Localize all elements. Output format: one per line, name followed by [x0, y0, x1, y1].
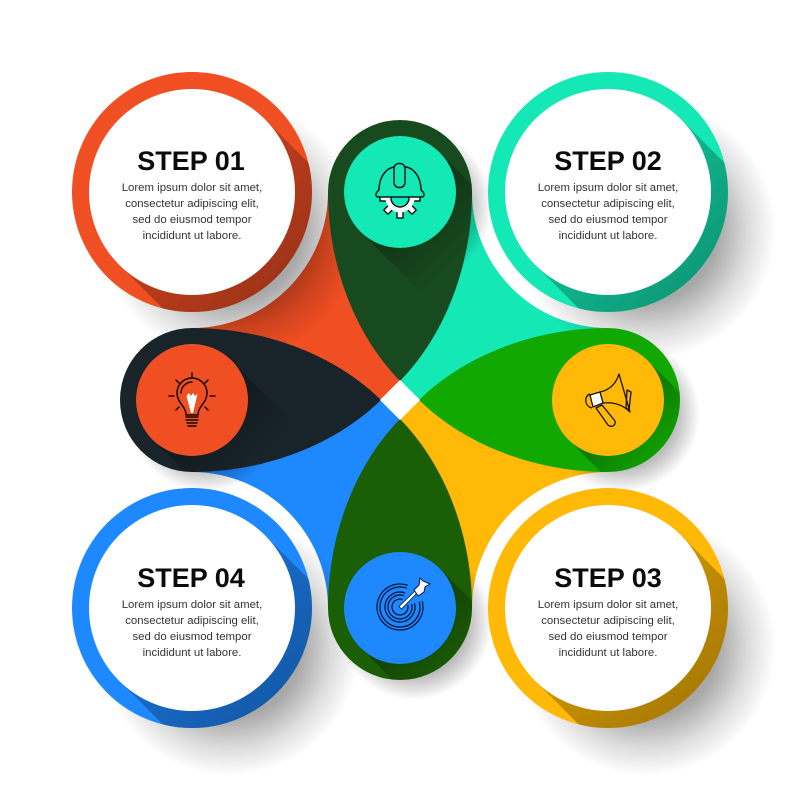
- orange quadrant: [192, 192, 400, 400]
- step 02 description: consectetur adipiscing elit,: [541, 198, 675, 210]
- bottom petal: [328, 420, 472, 680]
- step 01 description: incididunt ut labore.: [143, 230, 241, 242]
- step 04 description: consectetur adipiscing elit,: [125, 615, 259, 627]
- step 04 heading: STEP 04: [137, 563, 245, 593]
- step 03 description: consectetur adipiscing elit,: [541, 615, 675, 627]
- right icon disc: [552, 344, 664, 456]
- icon: helmet and gear: [376, 164, 424, 218]
- right petal shadow: [544, 336, 700, 492]
- step 02 card: [488, 72, 728, 312]
- step 02 description: incididunt ut labore.: [559, 230, 657, 242]
- top petal: [328, 120, 472, 380]
- step 03 description: sed do eiusmod tempor: [548, 631, 668, 643]
- icon: target and arrow: [377, 578, 430, 630]
- step 03 heading: STEP 03: [554, 563, 662, 593]
- step 03 card: [488, 488, 728, 728]
- step 02 description: sed do eiusmod tempor: [548, 214, 668, 226]
- center white diamond: [380, 380, 420, 420]
- step 04 card: [72, 488, 312, 728]
- step 01 description: sed do eiusmod tempor: [132, 214, 252, 226]
- step 02 long shadow: [516, 100, 776, 360]
- left petal shadow: [128, 336, 284, 492]
- teal quadrant: [400, 192, 608, 400]
- right petal: [420, 328, 680, 472]
- step 03 description: incididunt ut labore.: [559, 647, 657, 659]
- bottom icon disc: [344, 552, 456, 664]
- step 04 description: sed do eiusmod tempor: [132, 631, 252, 643]
- step 03 long shadow: [516, 516, 776, 776]
- icon: megaphone: [586, 374, 631, 426]
- step 02 description: Lorem ipsum dolor sit amet,: [538, 182, 678, 194]
- icon: light bulb: [169, 373, 215, 426]
- yellow quadrant: [400, 400, 608, 608]
- step 01 long shadow: [100, 100, 360, 360]
- step 03 description: Lorem ipsum dolor sit amet,: [538, 599, 678, 611]
- bottom petal shadow: [336, 544, 492, 700]
- step 01 description: Lorem ipsum dolor sit amet,: [122, 182, 262, 194]
- step 04 long shadow: [100, 516, 360, 776]
- step 01 card: [72, 72, 312, 312]
- left petal: [120, 328, 380, 472]
- top icon disc: [344, 136, 456, 248]
- step 01 heading: STEP 01: [137, 146, 245, 176]
- blue quadrant: [192, 400, 400, 608]
- step 02 heading: STEP 02: [554, 146, 662, 176]
- top petal shadow: [336, 128, 492, 284]
- left icon disc: [136, 344, 248, 456]
- step 04 description: Lorem ipsum dolor sit amet,: [122, 599, 262, 611]
- step 04 description: incididunt ut labore.: [143, 647, 241, 659]
- step 01 description: consectetur adipiscing elit,: [125, 198, 259, 210]
